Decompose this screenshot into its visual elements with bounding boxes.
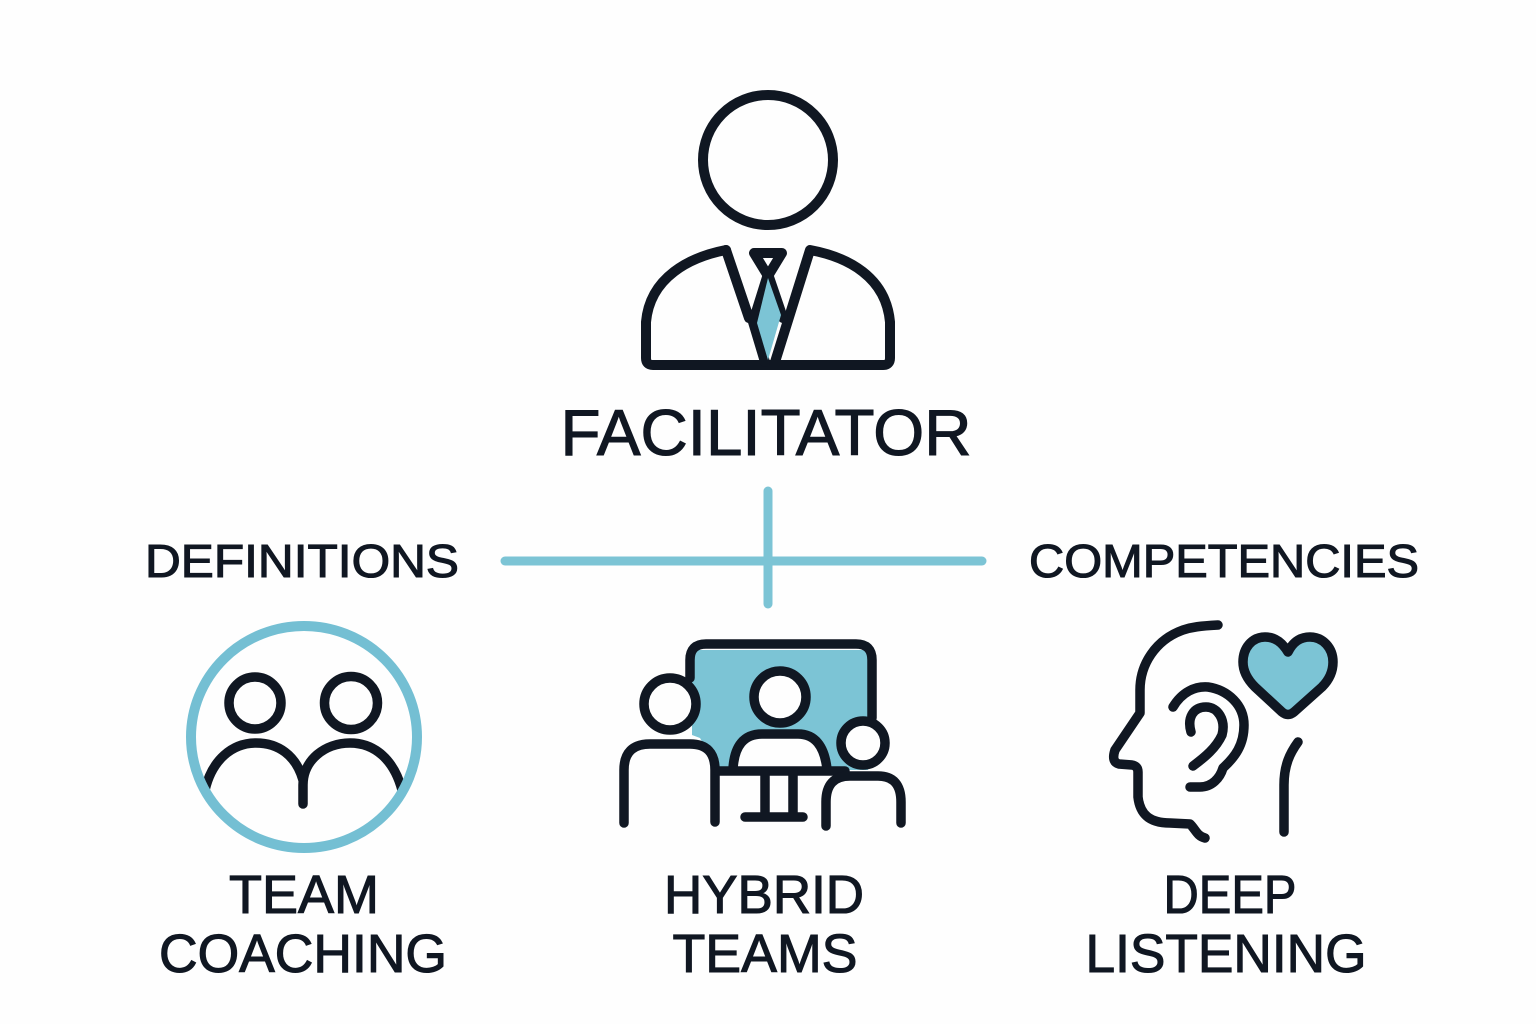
icon: facilitator person bbox=[646, 95, 890, 365]
label: hybrid teams: HYBRID bbox=[664, 865, 864, 925]
label: team coaching: TEAM bbox=[229, 865, 379, 925]
connector: cross lines bbox=[505, 491, 982, 604]
label: deep listening: DEEP bbox=[1164, 865, 1296, 925]
icon: hybrid teams bbox=[624, 644, 901, 826]
label: hybrid teams: TEAMS bbox=[672, 924, 858, 984]
icon: deep listening bbox=[1114, 625, 1333, 838]
label: team coaching: COACHING bbox=[159, 924, 447, 984]
label: competencies: COMPETENCIES bbox=[1029, 535, 1419, 587]
label: definitions: DEFINITIONS bbox=[145, 535, 459, 587]
title: facilitator: FACILITATOR bbox=[560, 396, 972, 469]
label: deep listening: LISTENING bbox=[1086, 924, 1366, 984]
icon: team coaching bbox=[191, 626, 417, 848]
